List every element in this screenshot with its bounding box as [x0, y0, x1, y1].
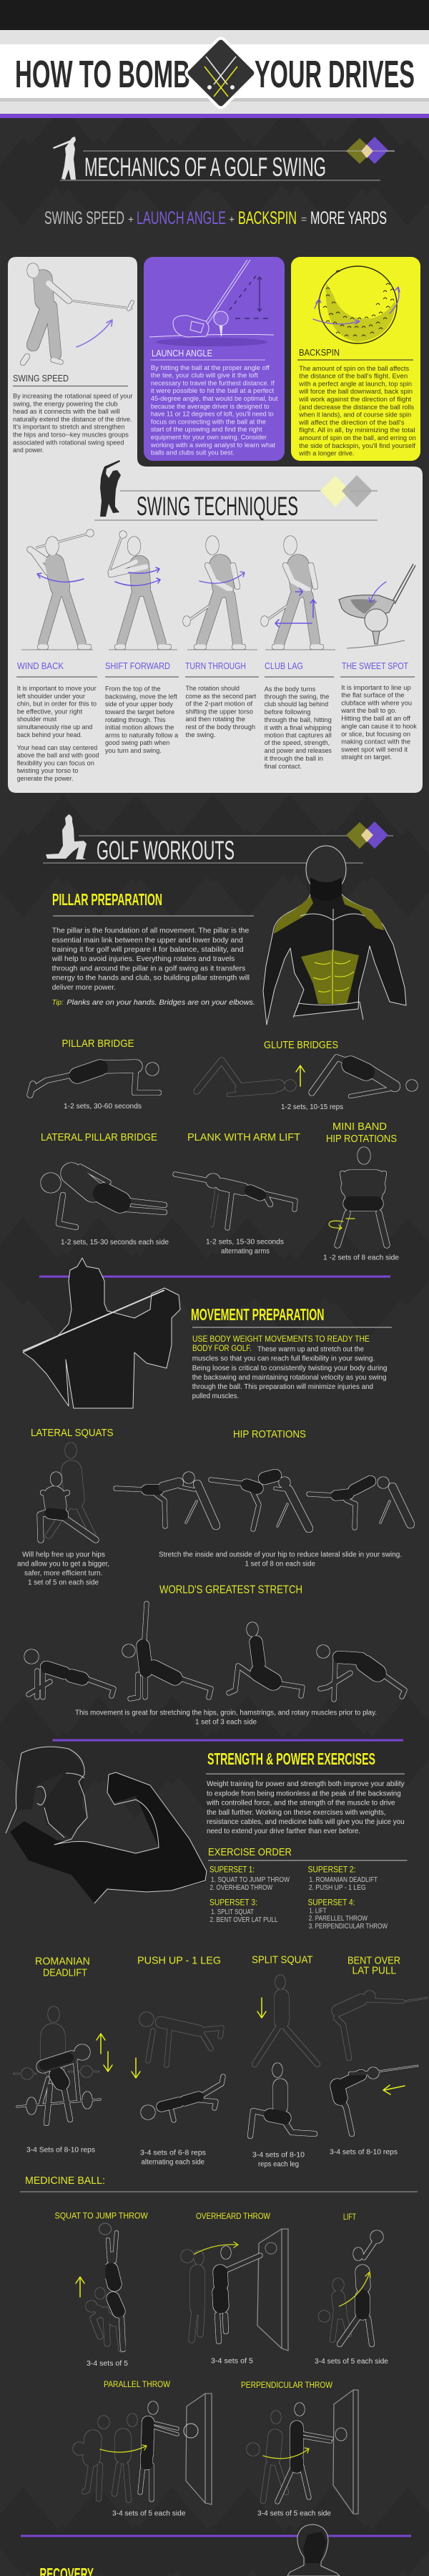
- list: exercise order: 2. PUSH UP - 1 LEG: [309, 1884, 366, 1892]
- list: exercise order: SUPERSET 4:: [307, 1898, 355, 1907]
- text block: movement preparation: USE BODY WEIGHT MOVEMENTS TO READY THE: [192, 1334, 370, 1344]
- exercise: pillar bridge: 1-2 sets, 30-60 seconds: [64, 1103, 142, 1111]
- text block: pillar preparation: Tip:: [52, 998, 64, 1007]
- text: the sweet spot: straight on target.: [341, 753, 392, 761]
- icon: white golfer silhouette: [53, 137, 76, 180]
- exercise: hip rotations: 1 set of 8 on each side: [245, 1560, 315, 1568]
- icon: lunge silhouette: [46, 814, 87, 859]
- text block: pillar preparation: training it for golf will prepare it for balance, stability, and: [52, 945, 244, 954]
- exercise: plank with arm lift: [175, 1131, 300, 1255]
- exercise: mini band hip rotations: [323, 1121, 399, 1262]
- heading: launch angle: LAUNCH ANGLE: [152, 348, 212, 358]
- exercise: push up - 1 leg: [132, 1954, 223, 2167]
- exercise: perpendicular throw: PERPENDICULAR THROW: [241, 2381, 332, 2390]
- exercise: bent over lat pull: BENT OVER: [347, 1954, 400, 1966]
- text: launch angle: [150, 364, 278, 457]
- figure: wind back: [21, 530, 94, 650]
- heading: medicine ball: MEDICINE BALL:: [25, 2175, 105, 2187]
- text: launch angle: working with a swing analyst to learn what: [150, 441, 275, 449]
- text block: pillar preparation: PILLAR PREPARATION: [52, 890, 162, 909]
- text: backspin: the side of backspin, you'll find yourself: [299, 442, 415, 450]
- heading: swing speed: SWING SPEED: [13, 373, 69, 384]
- exercise: lateral squats: LATERAL SQUATS: [31, 1427, 113, 1439]
- text: club lag: through the ball, hitting: [265, 716, 332, 724]
- icon: crossed golf clubs diamond: [184, 36, 257, 109]
- exercise: glute bridges: 1-2 sets, 10-15 reps: [281, 1103, 343, 1111]
- formula: swing speed + launch angle + backspin = more yards: [44, 208, 387, 228]
- illustration: torso with core highlighted: [263, 846, 406, 1025]
- text: swing speed: [13, 392, 133, 454]
- text block: pillar preparation: will help to avoid injuries. Everything rotates and travels: [51, 955, 235, 963]
- exercise: squat to jump throw: [54, 2212, 148, 2368]
- divider: purple rule: [21, 2534, 411, 2537]
- text: swing speed: associated with rotational swing speed: [13, 439, 124, 447]
- exercise: plank with arm lift: PLANK WITH ARM LIFT: [187, 1131, 300, 1143]
- exercise: lateral squats: [17, 1427, 113, 1587]
- text: club lag: motion that captures all: [265, 731, 332, 740]
- list: exercise order: EXERCISE ORDER: [208, 1846, 292, 1858]
- exercise: overhead throw: [181, 2212, 288, 2366]
- exercise: lateral squats: and allow you to get a bigger,: [17, 1560, 109, 1568]
- illustration: recovery man: [287, 2524, 340, 2576]
- text: club lag: it with a final whipping: [265, 724, 332, 732]
- formula: swing speed + launch angle + backspin = more yards: LAUNCH ANGLE: [137, 208, 226, 228]
- technique headings: WIND BACK: [17, 660, 64, 671]
- formula: swing speed + launch angle + backspin = more yards: MORE YARDS: [310, 208, 387, 228]
- exercise: world's greatest stretch: WORLD'S GREATEST STRETCH: [159, 1584, 302, 1596]
- text: swing speed: It's important to stretch and strengthen: [13, 424, 124, 431]
- exercise: romanian deadlift: ROMANIAN: [35, 1956, 90, 1968]
- illustration: golfer follow-through: [23, 263, 132, 363]
- text block: pillar preparation: energy to the hands and club, so building pillar strength will: [52, 973, 250, 982]
- exercise: split squat: 3-4 sets of 8-10: [252, 2151, 305, 2160]
- text: club lag: of the speed, strength,: [265, 739, 330, 747]
- illustration: club and ball on tee: [149, 260, 274, 346]
- text block: movement preparation: These warm up and stretch out the: [257, 1345, 364, 1354]
- illustration: man stretching with bar: [23, 1258, 180, 1408]
- text: club lag: before following: [265, 708, 310, 716]
- exercise: romanian deadlift: 3-4 Sets of 8-10 reps: [26, 2147, 95, 2154]
- list: exercise order: 2. BENT OVER LAT PULL: [210, 1916, 278, 1924]
- text: launch angle: focus on connecting with the ball at the: [151, 418, 266, 426]
- exercise: overhead throw: 3-4 sets of 5: [211, 2357, 253, 2366]
- text: the sweet spot: It is important to line up: [341, 684, 411, 692]
- exercise: lateral squats: 1 set of 5 on each side: [28, 1579, 99, 1587]
- text: wind back: shoulder must: [17, 716, 56, 723]
- header banner: [0, 0, 429, 118]
- text block: pillar preparation: Planks are on your hands. Bridges are on your elbows.: [66, 998, 255, 1007]
- exercise: mini band hip rotations: HIP ROTATIONS: [326, 1133, 397, 1145]
- text block: pillar preparation: deliver more power.: [52, 983, 116, 992]
- list: exercise order: 1. ROMANIAN DEADLIFT: [309, 1876, 378, 1884]
- exercise: plank with arm lift: 1-2 sets, 15-30 seconds: [206, 1238, 284, 1246]
- text: shift forward: you turn and swing.: [105, 747, 162, 755]
- text: backspin: with a longer drive.: [298, 450, 355, 458]
- text: shift forward: good swing path when: [105, 739, 169, 747]
- list: exercise order: [208, 1846, 408, 1931]
- text block: movement preparation: pulled muscles.: [192, 1392, 239, 1400]
- exercise: world's greatest stretch: 1 set of 3 each side: [195, 1719, 257, 1726]
- list: exercise order: 1. SQUAT TO JUMP THROW: [211, 1876, 290, 1884]
- exercise: push up - 1 leg: PUSH UP - 1 LEG: [137, 1954, 221, 1966]
- exercise: lift: 3-4 sets of 5 each side: [315, 2358, 388, 2366]
- text block: pillar preparation: The pillar is the foundation of all movement. The pillar is the: [52, 926, 249, 935]
- exercise: lateral squats: safer, more efficient turn.: [24, 1570, 103, 1577]
- heading: backspin: BACKSPIN: [299, 347, 340, 358]
- text: wind back: [17, 685, 99, 783]
- text block: movement preparation: Being loose is critical to consistently twisting your body during: [192, 1364, 388, 1372]
- exercise: squat to jump throw: SQUAT TO JUMP THROW: [54, 2212, 148, 2221]
- technique headings: SHIFT FORWARD: [105, 660, 170, 671]
- exercise: pillar bridge: [30, 1038, 159, 1111]
- text: shift forward: rotating through. This: [105, 716, 166, 724]
- exercise: bent over lat pull: LAT PULL: [352, 1964, 396, 1976]
- exercise: lift: LIFT: [343, 2213, 356, 2222]
- text: turn through: of the 2-part motion of: [186, 700, 253, 708]
- exercise: overhead throw: OVERHEARD THROW: [196, 2212, 270, 2221]
- text: the sweet spot: Hitting the ball at an off: [341, 715, 410, 723]
- heading: swing techniques: [94, 460, 378, 521]
- text: swing speed: swing, the energy powering the club: [13, 400, 118, 408]
- exercise: romanian deadlift: DEADLIFT: [43, 1967, 87, 1979]
- text block: strength and power exercises: [206, 1750, 405, 1835]
- text: backspin: when it lands), and of course side spin: [298, 411, 411, 419]
- text block: movement preparation: muscles so that you can reach full flexibility in your swing.: [192, 1354, 375, 1362]
- exercise: plank with arm lift: alternating arms: [221, 1248, 270, 1255]
- formula: swing speed + launch angle + backspin = more yards: +: [128, 213, 134, 225]
- text: launch angle: By hitting the ball at the proper angle off: [151, 364, 270, 372]
- text: shift forward: backswing, move the left: [105, 693, 177, 701]
- technique headings: THE SWEET SPOT: [342, 660, 408, 671]
- text: wind back: It is important to move your: [17, 685, 97, 693]
- text: turn through: shifting the upper torso: [186, 708, 253, 716]
- list: exercise order: 2. OVERHEAD THROW: [210, 1884, 272, 1892]
- list: exercise order: SUPERSET 3:: [209, 1898, 257, 1907]
- text block: movement preparation: through the ball. This preparation will minimize injuries and: [192, 1382, 373, 1391]
- text: swing speed: naturally extend the distance of the drive.: [13, 416, 132, 424]
- exercise: mini band hip rotations: 1 -2 sets of 8 each side: [323, 1254, 399, 1262]
- panel: swing speed: [8, 257, 423, 793]
- divider: purple rule: [39, 1275, 390, 1278]
- text: club lag: As the body turns: [265, 686, 315, 693]
- exercise: glute bridges: GLUTE BRIDGES: [264, 1039, 338, 1051]
- text: backspin: flight. All in all, by minimizing the total: [299, 426, 415, 434]
- text: the sweet spot: or slice, but focusing on: [341, 731, 410, 738]
- list: exercise order: 3. PERPENDICULAR THROW: [309, 1923, 388, 1931]
- text: wind back: back behind your head.: [17, 731, 82, 739]
- exercise: hip rotations: HIP ROTATIONS: [233, 1428, 306, 1440]
- text: backspin: [298, 365, 416, 458]
- exercise: lateral pillar bridge: LATERAL PILLAR BRIDGE: [41, 1131, 157, 1143]
- exercise: squat to jump throw: 3-4 sets of 5: [87, 2360, 128, 2368]
- exercise: romanian deadlift: [14, 1956, 112, 2154]
- text: shift forward: toward the target before: [105, 708, 174, 716]
- formula: swing speed + launch angle + backspin = more yards: SWING SPEED: [44, 208, 124, 228]
- text: club lag: and power and releases: [265, 747, 332, 755]
- text: the sweet spot: [340, 684, 417, 761]
- text: club lag: [265, 686, 332, 771]
- text: launch angle: because the average driver is designed to: [151, 403, 270, 411]
- text: the sweet spot: making contact with the: [341, 738, 410, 746]
- exercise: perpendicular throw: 3-4 sets of 5 each side: [257, 2510, 331, 2517]
- figure: the sweet spot: [339, 564, 415, 648]
- illustration: flexed arm: [6, 1747, 207, 1903]
- section heading: golf workouts: [43, 814, 393, 865]
- exercise: split squat: reps each leg: [258, 2161, 299, 2168]
- text: the sweet spot: the flat surface of the: [341, 691, 405, 700]
- exercise: world's greatest stretch: [24, 1584, 405, 1726]
- heading: swing techniques: SWING TECHNIQUES: [137, 492, 298, 521]
- text block: movement preparation: BODY FOR GOLF.: [192, 1343, 252, 1353]
- exercise: lateral squats: Will help free up your hips: [22, 1551, 105, 1558]
- heading text: GOLF WORKOUTS: [97, 836, 235, 865]
- exercise: push up - 1 leg: alternating each side: [142, 2158, 204, 2167]
- text: club lag: it through the ball in: [265, 755, 323, 763]
- exercise: perpendicular throw: [241, 2381, 358, 2517]
- text: turn through: and then rotating the: [186, 716, 245, 723]
- exercise: parallel throw: PARALLEL THROW: [104, 2381, 170, 2389]
- text: the sweet spot: sweet spot will send it: [341, 746, 408, 754]
- illustration: dimpled golf ball: [313, 266, 400, 343]
- figure: turn through: [183, 536, 257, 650]
- exercise: parallel throw: [73, 2381, 212, 2517]
- text: swing speed: the hips and torso--key muscles groups: [13, 431, 129, 439]
- text: turn through: [186, 685, 257, 739]
- icon: overlapping diamonds: [346, 137, 395, 164]
- text: launch angle: start of the upswing and find the right: [151, 426, 262, 434]
- technique headings: CLUB LAG: [265, 660, 303, 671]
- exercise: split squat: SPLIT SQUAT: [252, 1953, 313, 1966]
- text: backspin: will force the ball downward, back spin: [298, 388, 413, 396]
- text: backspin: will work against the direction of flight: [298, 396, 412, 404]
- text: turn through: The rotation should: [186, 685, 240, 693]
- text: wind back: flexibility you can focus on: [17, 760, 94, 767]
- text block: strength and power exercises: need to extend your drive farther than ever before.: [207, 1827, 360, 1835]
- list: exercise order: 1. SPLIT SQUAT: [211, 1908, 254, 1916]
- text: backspin: The amount of spin on the ball affects: [299, 365, 409, 373]
- text: club lag: through the swing, the: [265, 693, 329, 701]
- text: backspin: will affect the direction of the ball's: [298, 419, 405, 426]
- exercise: parallel throw: 3-4 sets of 5 each side: [112, 2510, 186, 2517]
- text block: pillar preparation: [51, 890, 255, 1007]
- text: wind back: simultaneously rise up and: [17, 723, 92, 731]
- arrow: swing speed: [77, 320, 112, 347]
- exercise: world's greatest stretch: This movement is great for stretching the hips, groin, hamstrings, and rotary muscles prior to play.: [75, 1709, 377, 1717]
- divider: purple rule: [53, 1739, 403, 1742]
- exercise: hip rotations: Stretch the inside and outside of your hip to reduce lateral slide in your swing.: [159, 1551, 402, 1558]
- icon: overlapping diamonds: [346, 821, 388, 849]
- text: shift forward: initial motion allows the: [105, 724, 174, 731]
- figure: club lag: [261, 536, 335, 650]
- formula: swing speed + launch angle + backspin = more yards: +: [229, 213, 235, 225]
- text: turn through: rest of the body through: [186, 723, 255, 731]
- formula: swing speed + launch angle + backspin = more yards: =: [301, 213, 307, 225]
- exercise: split squat: [250, 1953, 317, 2168]
- text block: strength and power exercises: to explode from being motionless at the peak of the backswing: [207, 1789, 401, 1797]
- text: swing speed: head as it connects with the ball will: [13, 408, 120, 416]
- exercise: hip rotations: [116, 1428, 410, 1568]
- panel: swing techniques: [16, 460, 417, 783]
- text: the sweet spot: clubface with where you: [341, 700, 412, 707]
- text: launch angle: 45-degree angle, that would be optimal, but: [151, 395, 278, 403]
- text block: movement preparation: [191, 1305, 392, 1400]
- text: launch angle: it were possible to hit the ball at a perfect: [151, 387, 274, 395]
- text: shift forward: side of your upper body: [105, 701, 173, 708]
- text: shift forward: arms to naturally follow a: [105, 731, 179, 740]
- text: swing speed: and power.: [13, 447, 44, 454]
- text block: strength and power exercises: resistance cables, and medicine balls will give you the juice you: [207, 1818, 405, 1826]
- text: wind back: generate the power.: [17, 775, 74, 783]
- exercise: bent over lat pull: [330, 1954, 427, 2157]
- text: launch angle: balls and clubs suit you best.: [151, 449, 235, 457]
- exercise: lateral pillar bridge: 1-2 sets, 15-30 seconds each side: [61, 1239, 169, 1246]
- panel: launch angle: [144, 257, 285, 461]
- text block: movement preparation: the backswing and maintaining rotational velocity as you swing: [192, 1373, 387, 1382]
- text: backspin: with a perfect angle at launch, top spin: [298, 380, 412, 388]
- text: turn through: the swing.: [186, 731, 216, 739]
- text: wind back: twisting your torso to: [17, 767, 79, 775]
- text: the sweet spot: want the ball to go.: [340, 707, 397, 715]
- figure: shift forward: [109, 531, 177, 650]
- list: exercise order: SUPERSET 2:: [307, 1866, 356, 1875]
- text: swing speed: By increasing the rotational speed of your: [13, 392, 133, 401]
- text: the sweet spot: angle can cause it to hook: [341, 723, 417, 731]
- text: backspin: (and decrease the distance the ball rolls: [299, 404, 414, 411]
- section heading: mechanics of a golf swing: [53, 137, 395, 182]
- text: shift forward: From the top of the: [105, 686, 161, 693]
- text block: strength and power exercises: Weight training for power and strength both improve your ability: [207, 1780, 405, 1788]
- exercise: mini band hip rotations: MINI BAND: [332, 1121, 387, 1133]
- text block: pillar preparation: through and around the pillar in a golf swing as it transfers: [52, 965, 245, 973]
- exercise: lift: [315, 2213, 388, 2366]
- text: launch angle: necessary to travel the furthest distance. If: [151, 379, 275, 387]
- technique headings: [17, 660, 408, 671]
- list: exercise order: SUPERSET 1:: [209, 1866, 255, 1875]
- text: launch angle: the tee, your club will give it the loft: [151, 372, 258, 380]
- text: launch angle: equipment for your own swing. Consider: [151, 434, 267, 441]
- technique headings: TURN THROUGH: [185, 660, 246, 671]
- text: backspin: amount of spin on the ball, and erring on: [299, 434, 416, 442]
- formula: swing speed + launch angle + backspin = more yards: BACKSPIN: [238, 208, 297, 228]
- exercise: glute bridges: [197, 1039, 418, 1111]
- text block: pillar preparation: essential main link between the upper and lower body and: [52, 936, 243, 945]
- title: HOW TO BOMB: [15, 53, 190, 96]
- list: exercise order: 2. PARELLEL THROW: [309, 1915, 368, 1923]
- exercise: push up - 1 leg: 3-4 sets of 6-8 reps: [140, 2150, 206, 2157]
- text: wind back: chin, but in order for this to: [17, 700, 97, 708]
- text block: strength and power exercises: with controlled force, and the strength of the muscle to drive: [206, 1799, 395, 1807]
- text: club lag: final contact.: [265, 763, 302, 771]
- text: shift forward: [105, 686, 179, 755]
- list: exercise order: 1. LIFT: [309, 1908, 326, 1915]
- exercise: lateral pillar bridge: [41, 1131, 169, 1246]
- text: club lag: club should lag behind: [265, 701, 328, 708]
- panel: backspin: [291, 257, 420, 461]
- text: wind back: above the ball and with good: [17, 751, 99, 760]
- text block: strength and power exercises: the ball further. Working on these exercises with weights,: [207, 1808, 386, 1817]
- text: backspin: the distance of the ball's flight. Even: [299, 373, 408, 381]
- text: turn through: come as the second part: [186, 693, 257, 701]
- exercise: bent over lat pull: 3-4 sets of 8-10 reps: [330, 2148, 398, 2157]
- text: wind back: left shoulder under your: [17, 693, 86, 701]
- text: wind back: be effective, your right: [17, 708, 83, 716]
- text block: movement preparation: MOVEMENT PREPARATION: [191, 1305, 325, 1324]
- text: launch angle: have 11 or 12 degrees of loft, you'll need to: [151, 411, 274, 419]
- text: wind back: Your head can stay centered: [17, 744, 97, 752]
- exercise: pillar bridge: PILLAR BRIDGE: [61, 1038, 134, 1050]
